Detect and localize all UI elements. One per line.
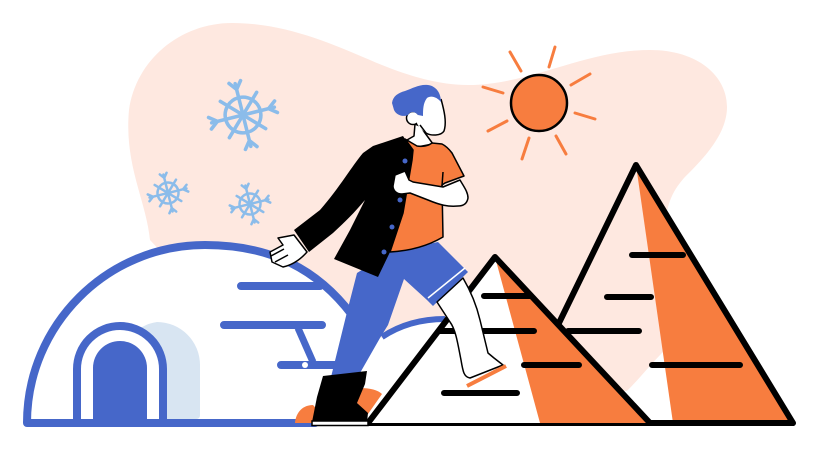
trousers and shorts <box>325 242 468 400</box>
boot <box>312 371 368 426</box>
igloo <box>27 245 445 423</box>
left hand <box>270 235 307 267</box>
face outline <box>420 99 445 135</box>
neck <box>407 124 433 147</box>
t-shirt <box>390 139 464 252</box>
icon: sun <box>483 47 595 159</box>
background blob <box>128 23 727 400</box>
jacket <box>294 136 413 277</box>
hair <box>392 85 441 116</box>
arm <box>393 171 468 206</box>
shorts cuff <box>428 268 465 298</box>
icon: large snowflake <box>202 74 284 156</box>
icon: small snowflake right <box>226 180 274 228</box>
icon: small snowflake left <box>144 169 192 217</box>
face <box>416 96 446 135</box>
ear <box>406 112 420 124</box>
shoe sole <box>467 366 506 386</box>
person <box>270 85 506 426</box>
front pyramid <box>368 257 650 423</box>
jacket buttons <box>382 158 408 254</box>
back pyramid <box>368 165 793 423</box>
raised leg <box>437 278 503 378</box>
sleeve crease <box>442 172 443 186</box>
orange foot behind boot <box>295 388 382 423</box>
